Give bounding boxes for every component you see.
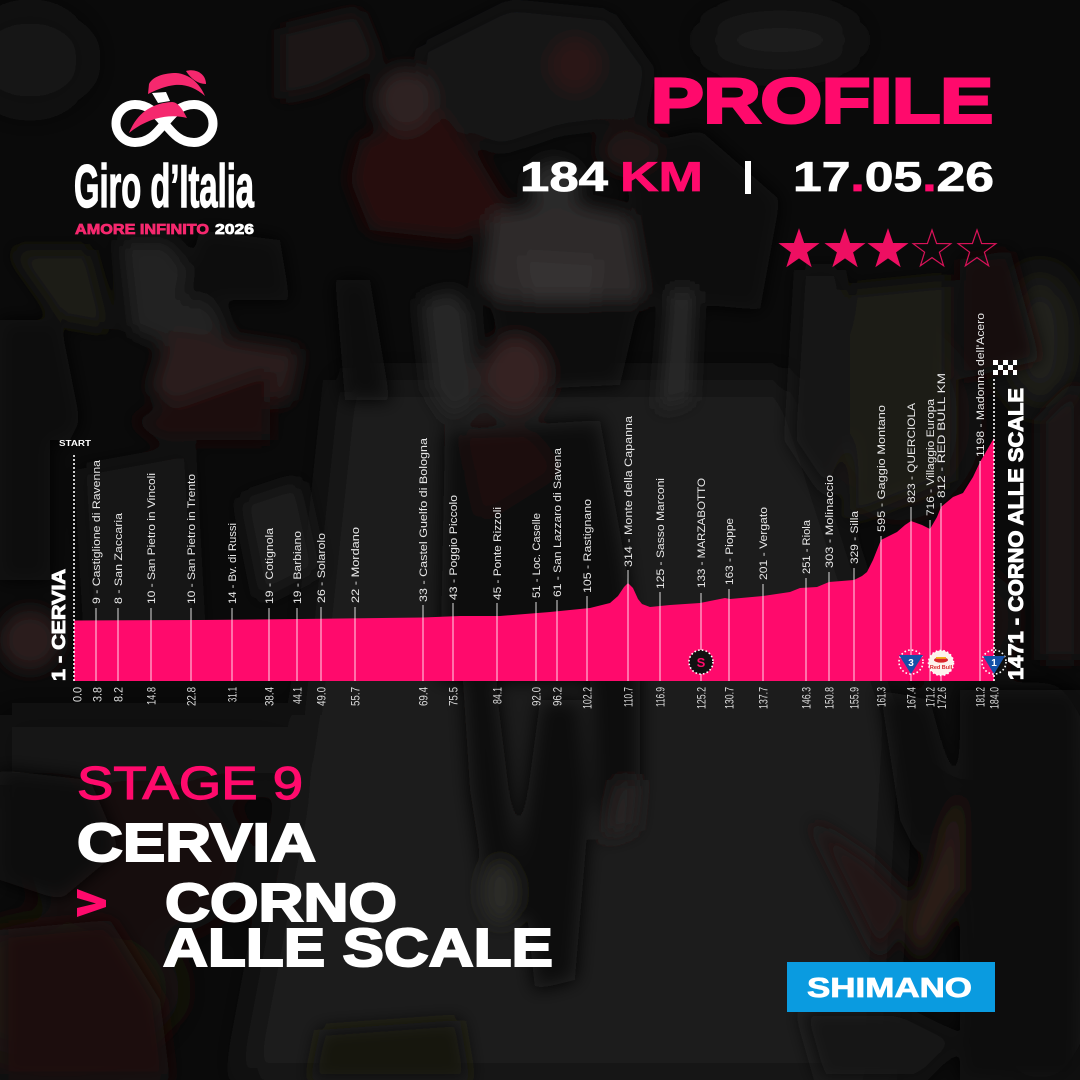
waypoint names and altitudes: 133 - MARZABOTTO (696, 478, 708, 588)
kilometre marks: 130.7 (722, 687, 736, 709)
waypoint names and altitudes: 61 - San Lazzaro di Savena (552, 447, 564, 597)
waypoint names and altitudes: 1198 - Madonna dell'Acero (975, 313, 987, 457)
waypoint names and altitudes: 163 - Pioppe (724, 518, 736, 585)
kilometre marks: 3.8 (90, 687, 104, 702)
waypoint names and altitudes: 45 - Ponte Rizzoli (492, 507, 504, 600)
kilometre marks: 110.7 (622, 687, 636, 707)
waypoint names and altitudes: 26 - Solarolo (316, 533, 328, 603)
waypoint names and altitudes: 19 - Barbiano (292, 531, 304, 604)
icon: sprint badge S (689, 650, 713, 674)
kilometre marks: 0.0 (70, 687, 84, 702)
sponsor logo: Shimano: SHIMANO (807, 972, 972, 1003)
start marker: START (59, 439, 91, 448)
finish town line 2: ALLE SCALE (163, 918, 553, 978)
waypoint names and altitudes: 22 - Mordano (350, 527, 362, 603)
icon: category 1 climb badge (982, 650, 1006, 674)
kilometre marks: 150.8 (822, 687, 836, 709)
icon: category 3 climb badge: 3 (908, 658, 914, 669)
waypoint names and altitudes: 201 - Vergato (758, 507, 770, 580)
kilometre marks: 31.1 (226, 687, 240, 702)
kilometre marks: 171.2 (924, 687, 938, 707)
kilometre marks: 102.2 (580, 687, 594, 709)
stage title block (77, 757, 553, 978)
start town: CERVIA (77, 813, 316, 873)
icon: infinity bicycle mark (116, 70, 213, 142)
waypoint names and altitudes: 812 - RED BULL KM (936, 373, 948, 498)
kilometre marks: 8.2 (112, 687, 126, 702)
waypoint names and altitudes (91, 313, 987, 604)
kilometre marks: 38.4 (262, 687, 276, 706)
distance and date line (520, 153, 994, 200)
start label: 1 - CERVIA (49, 569, 69, 681)
waypoint names and altitudes: 595 - Gaggio Montano (876, 405, 888, 532)
waypoint names and altitudes: 51 - Loc. Caselle (531, 513, 543, 598)
finish town line 1: CORNO (165, 873, 397, 933)
kilometre marks: 181.2 (974, 687, 988, 707)
kilometre marks: 49.0 (314, 687, 328, 706)
kilometre marks: 167.4 (904, 687, 918, 709)
finish marker (993, 360, 1017, 681)
wordmark: Giro d’Italia (74, 153, 254, 220)
kilometre marks: 125.2 (694, 687, 708, 709)
stage number: STAGE 9 (77, 757, 303, 809)
kilometre marks: 14.8 (144, 687, 158, 705)
elevation area (74, 438, 994, 681)
waypoint names and altitudes: 251 - Riola (801, 519, 813, 574)
kilometre marks: 92.0 (530, 687, 544, 706)
waypoint names and altitudes: 125 - Sasso Marconi (655, 478, 667, 589)
waypoint lines (96, 461, 980, 681)
waypoint names and altitudes: 823 - QUERCIOLA (906, 402, 918, 503)
chart: stage elevation profile (49, 313, 1028, 709)
waypoint names and altitudes: 9 - Castiglione di Ravenna (91, 459, 103, 604)
waypoint names and altitudes: 716 - Villaggio Europa (925, 398, 937, 516)
waypoint names and altitudes: 105 - Rastignano (582, 499, 594, 593)
heading: PROFILE: PROFILE (651, 66, 993, 136)
waypoint names and altitudes: 10 - San Pietro in Trento (186, 474, 198, 604)
kilometre marks: 161.3 (874, 687, 888, 707)
kilometre marks: 172.6 (935, 687, 949, 709)
kilometre marks: 55.7 (348, 687, 362, 706)
waypoint names and altitudes: 19 - Cotignola (264, 527, 276, 604)
waypoint names and altitudes: 10 - San Pietro in Vincoli (146, 473, 158, 604)
sponsor logo: Shimano (787, 962, 995, 1012)
waypoint names and altitudes: 14 - Bv. di Russi (227, 523, 239, 604)
tagline year: 2026 (215, 221, 254, 238)
kilometre marks (70, 687, 1002, 709)
icon: category 3 climb badge (899, 650, 923, 674)
separator (745, 161, 751, 194)
kilometre marks: 69.4 (416, 687, 430, 706)
icon: Red Bull KM badge (928, 650, 954, 676)
icon: Red Bull KM badge: Red Bull (930, 665, 953, 671)
kilometre marks: 155.9 (848, 687, 862, 709)
kilometre marks: 184.0 (988, 687, 1002, 709)
kilometre marks: 137.7 (756, 687, 770, 709)
distance unit: KM (620, 153, 703, 200)
kilometre marks: 116.9 (654, 687, 668, 707)
kilometre marks: 84.1 (490, 687, 504, 704)
waypoint names and altitudes: 43 - Poggio Piccolo (448, 495, 460, 600)
waypoint names and altitudes: 329 - Silla (849, 510, 861, 564)
logo: Giro d'Italia (74, 70, 254, 238)
date: 17 .05 .26 (793, 153, 994, 200)
difficulty rating: 3 of 5 stars (780, 230, 996, 266)
kilometre marks: 146.3 (800, 687, 814, 709)
tagline: AMORE INFINITO (75, 221, 209, 238)
distance value: 184 (520, 153, 609, 200)
icon: sprint badge S: S (697, 655, 706, 670)
kilometre marks: 22.8 (184, 687, 198, 706)
waypoint names and altitudes: 303 - Molinaccio (824, 475, 836, 568)
icon: category 1 climb badge: 1 (991, 658, 997, 669)
waypoint names and altitudes: 314 - Monte della Capanna (623, 415, 635, 567)
kilometre marks: 44.1 (290, 687, 304, 704)
arrow (77, 889, 106, 917)
waypoint names and altitudes: 8 - San Zaccaria (113, 512, 125, 604)
waypoint names and altitudes: 33 - Castel Guelfo di Bologna (418, 437, 430, 602)
kilometre marks: 75.5 (446, 687, 460, 706)
finish label: 1471 - CORNO ALLE SCALE (1005, 388, 1028, 680)
kilometre marks: 96.2 (550, 687, 564, 706)
